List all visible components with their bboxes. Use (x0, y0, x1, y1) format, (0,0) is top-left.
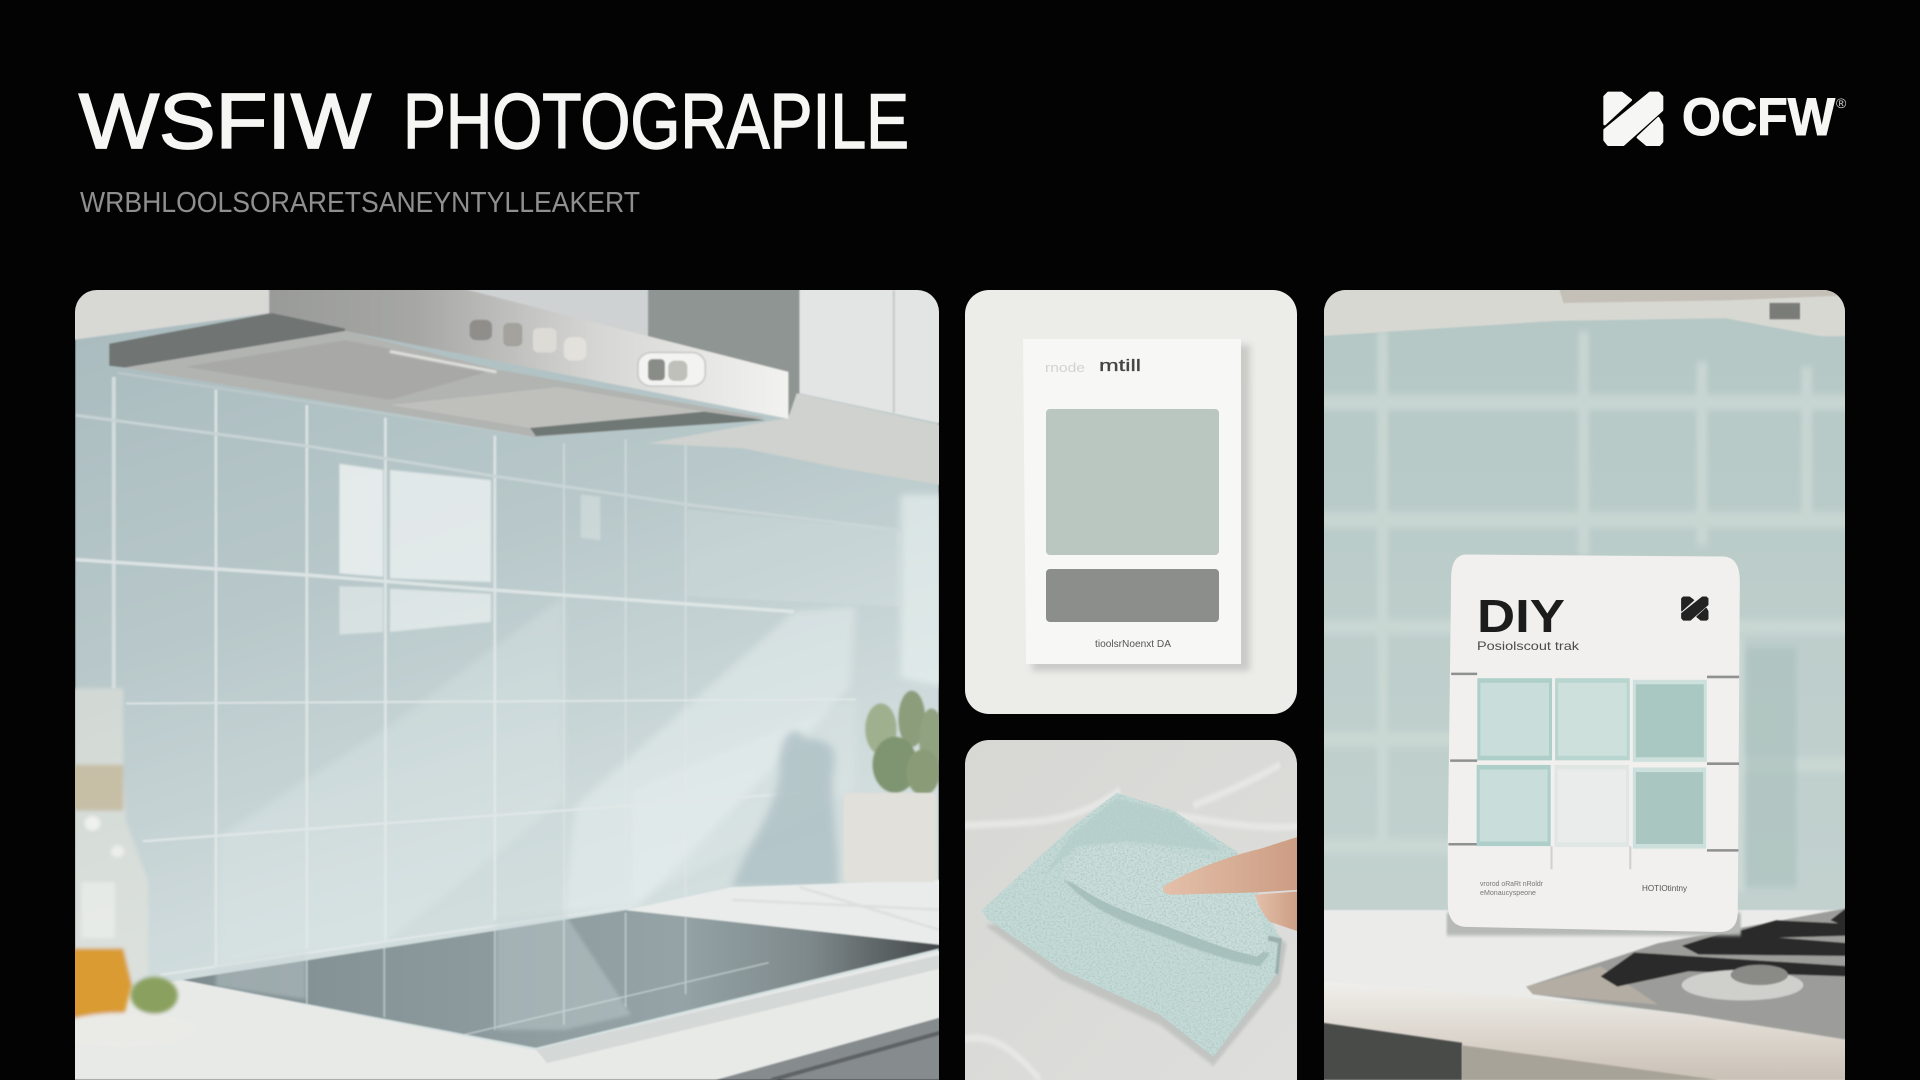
icon: logo mark (1605, 93, 1662, 145)
panel: microfiber cloth on marble (960, 740, 1300, 1080)
cooktop glass (182, 910, 950, 1048)
subtitle: WRBHLOOLSORARETSANEYNTYLLEAKERT (80, 187, 640, 219)
lower cabinets (1320, 1022, 1462, 1080)
window reflection (338, 463, 600, 635)
hood dark edge (109, 313, 345, 368)
upper cabinet band (1324, 290, 1845, 336)
hood body (180, 290, 790, 419)
panel: tile sample card (965, 290, 1297, 714)
wall above hood (429, 280, 648, 351)
card heading: mtill (1099, 356, 1141, 375)
registered mark: ® (1836, 95, 1847, 111)
logo (1605, 88, 1847, 147)
right dark cabinet side (648, 280, 800, 418)
card heading faded: rnode (1045, 360, 1085, 375)
tile swatches (1478, 681, 1705, 846)
sunlight bands (226, 490, 939, 910)
kit fine print left: eMonaucyspeone (1480, 888, 1536, 897)
swatch: gray (1046, 569, 1219, 622)
sample card (1023, 339, 1241, 664)
front counter (70, 948, 950, 1080)
top-left cabinet (70, 280, 269, 340)
upper cabinet (798, 290, 939, 424)
logo wordmark: OCFW (1682, 88, 1835, 147)
counter lower edge (715, 1015, 950, 1080)
tile grout lines (76, 373, 901, 975)
potted plant (843, 691, 944, 882)
kit fine print right: HOTIOtintny (1642, 883, 1688, 893)
gas stove (1526, 905, 1850, 1040)
title: WSFIW (79, 77, 371, 165)
hand (1163, 836, 1300, 932)
blurred tile grout (1320, 331, 1850, 892)
kit subheading: Posiolscout trak (1477, 639, 1580, 653)
DIY kit card (1448, 554, 1740, 932)
title (79, 77, 909, 165)
icon: mini logo (1682, 597, 1708, 620)
kit fine print left: vrorod oRaRt nRoldr (1480, 879, 1543, 888)
hood buttons (470, 320, 705, 386)
towel shadow (987, 924, 1286, 1066)
title: PHOTOGRAPILE (403, 77, 909, 165)
towel (982, 793, 1280, 1057)
card shadow (1032, 345, 1250, 671)
hood underside (123, 331, 766, 437)
cabinet underside (648, 393, 950, 487)
card caption: tioolsrNoenxt DA (1095, 639, 1171, 650)
counter front edge (1324, 1000, 1845, 1080)
panel: kitchen backsplash photo (56, 280, 950, 1080)
counter top (1320, 910, 1850, 1002)
card shadow (1447, 913, 1741, 936)
blurred bottle (75, 686, 180, 1021)
kit heading: DIY (1477, 590, 1565, 642)
swatch: pale green-gray (1046, 409, 1219, 555)
back counter (626, 879, 950, 946)
panel: DIY kit on counter (1320, 280, 1850, 1080)
kit fine print left (1480, 879, 1543, 897)
plant shadow (732, 731, 839, 887)
darker tile right (1746, 647, 1797, 887)
marble veins (960, 765, 1300, 1080)
